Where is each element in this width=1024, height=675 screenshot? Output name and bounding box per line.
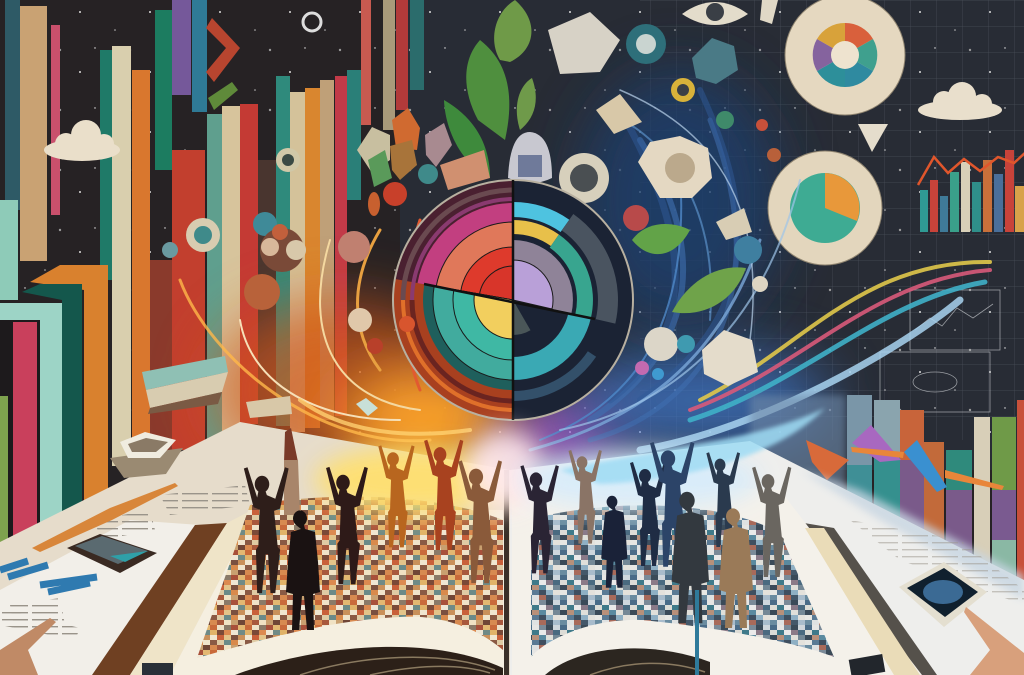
ribbon: chart arrow bbox=[806, 425, 1004, 492]
swirl lines rainbow bbox=[640, 262, 990, 450]
panel: book cover edge right bbox=[804, 523, 937, 675]
glow: white light at spine bbox=[465, 430, 545, 510]
people: right group bbox=[520, 442, 791, 628]
people: left group bbox=[244, 428, 502, 630]
panel: back bars left bbox=[5, 0, 424, 470]
panel: book cover edge left bbox=[92, 523, 227, 675]
panel: lower right bars bbox=[750, 395, 1024, 590]
icon: tablet left bbox=[67, 534, 157, 573]
wheel: lower left rings bbox=[423, 284, 513, 390]
marker: blue pole bbox=[695, 590, 699, 675]
chart: top pie ring bbox=[785, 0, 905, 115]
icons: floating objects bbox=[162, 12, 781, 386]
panel: right chart grid lines bbox=[880, 290, 1000, 412]
decoration: eye icon top bbox=[682, 0, 888, 152]
wheel: upper right bands bbox=[513, 202, 569, 232]
icons: leaves bbox=[444, 0, 746, 313]
icon: book stack left bbox=[110, 356, 378, 478]
panel: book page right bbox=[504, 470, 922, 675]
icon: cloud right bbox=[918, 82, 1002, 120]
wheel: upper left rings bbox=[418, 203, 513, 300]
panel: right wide page bbox=[510, 441, 1024, 675]
wheel: divider lines bbox=[424, 180, 595, 420]
swirl: bright cyan wave bbox=[560, 408, 825, 484]
icon: tablet right bbox=[899, 562, 987, 627]
panel: book page left bbox=[130, 497, 507, 675]
person: tall raised arms bbox=[284, 428, 300, 515]
text blocks bbox=[160, 485, 250, 515]
swirl lines blue bbox=[530, 90, 800, 450]
swirl lines warm bbox=[180, 220, 470, 441]
glow: warm light above left page bbox=[315, 446, 515, 514]
glow: cool light above right page bbox=[520, 450, 760, 510]
wheel: left half backing bbox=[393, 180, 513, 420]
chart: small bars top right bbox=[918, 139, 1024, 232]
panel: left wide page bbox=[0, 422, 510, 675]
icon: hand right bbox=[964, 607, 1024, 675]
wheel: right half backing bbox=[513, 180, 633, 420]
icon: cloud left bbox=[44, 120, 120, 161]
icon: hand left bbox=[0, 618, 56, 675]
chart: lower pie ring bbox=[768, 151, 882, 265]
chart: central radial wheel bbox=[393, 180, 633, 420]
icons: small objects beside wheel bbox=[367, 316, 415, 354]
icon: pencil bbox=[32, 483, 178, 552]
glow: warm and cool light bbox=[210, 70, 830, 480]
wheel: warm lower left backing bbox=[393, 279, 513, 420]
wheel: lower right bands bbox=[513, 313, 591, 380]
chart stripes bbox=[0, 561, 97, 592]
panel: front bars left bbox=[0, 200, 108, 547]
wheel: outer arcs bbox=[393, 180, 633, 420]
